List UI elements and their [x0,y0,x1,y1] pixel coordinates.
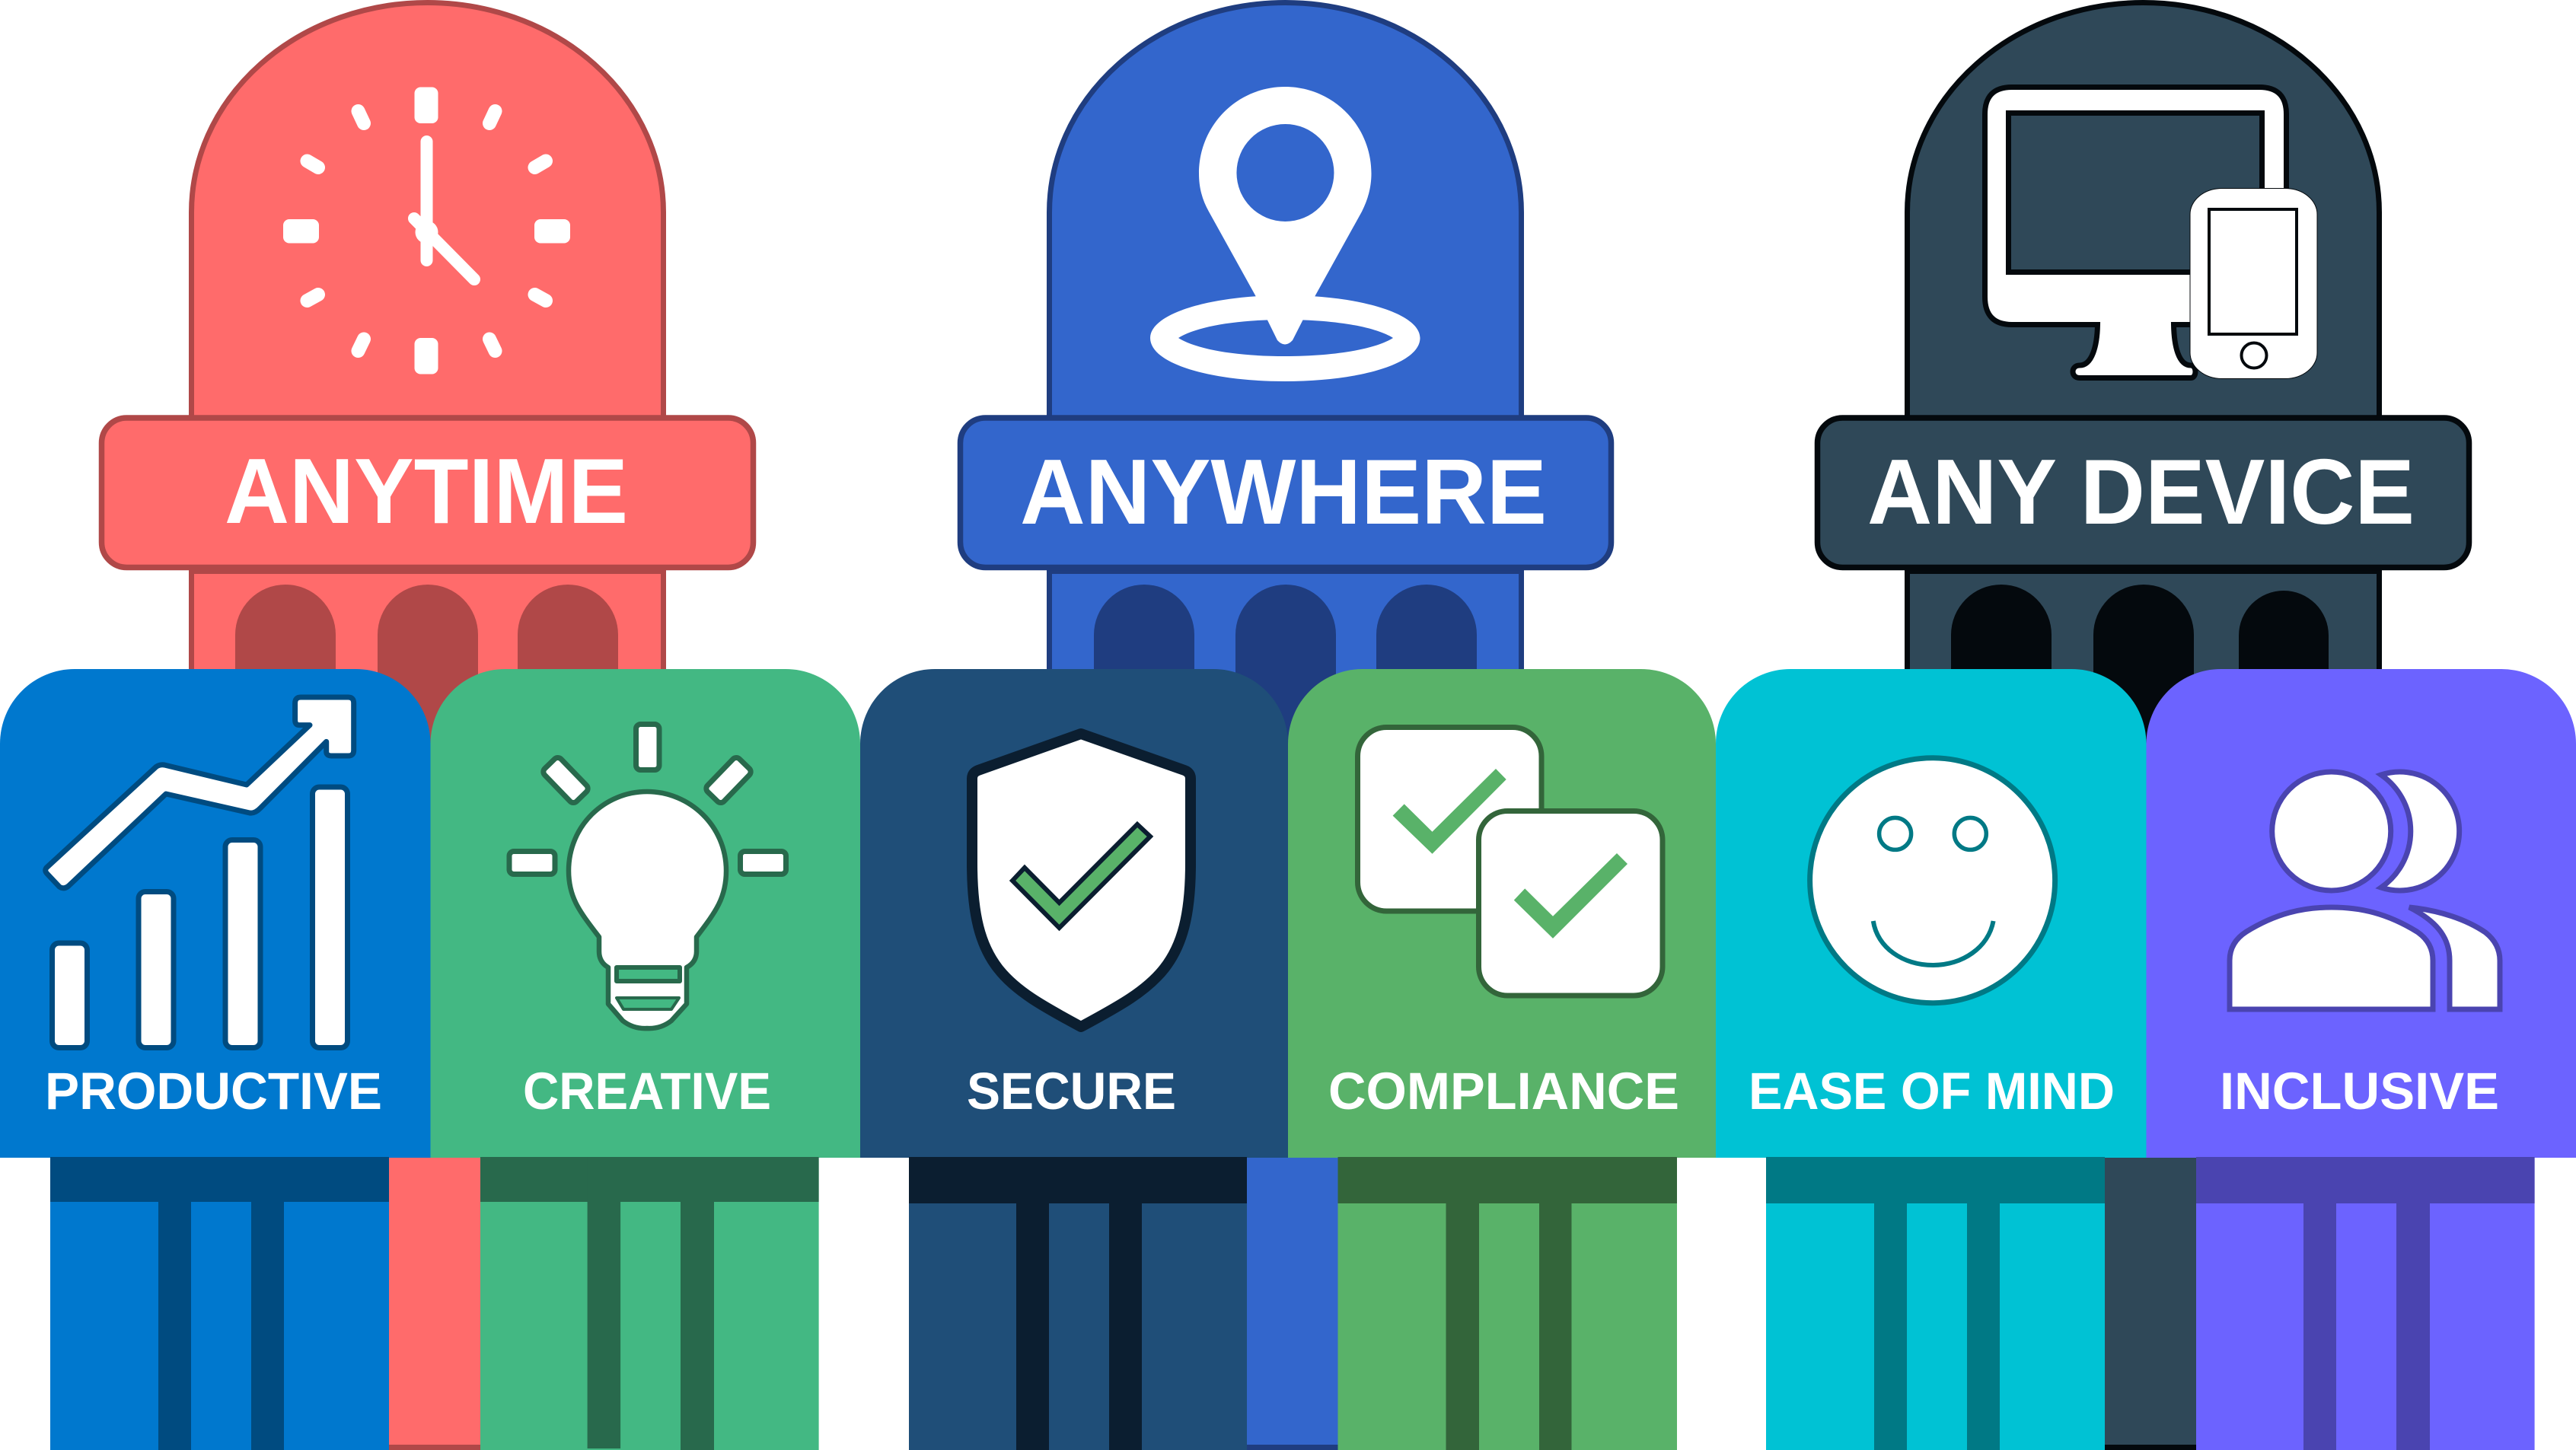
pillar: inclusive [2147,669,2576,1450]
bulb thread top [617,967,680,981]
pillar: compliance [1288,669,1716,1450]
phone button [2241,343,2267,368]
clock major ticks [283,87,570,374]
pillar card [431,669,860,1158]
pillar base [2196,1157,2535,1450]
front head [2272,772,2391,891]
icon: check boxes [1358,728,1663,996]
first check mark [1393,769,1506,854]
first check box [1358,728,1541,911]
shield check [1012,824,1150,928]
phone screen [2209,209,2297,334]
icon: people [2230,772,2500,1009]
band underline [1047,567,1524,574]
pillar base [1766,1157,2105,1450]
label: compliance: COMPLIANCE [1328,1062,1679,1120]
icon: clock [283,87,570,374]
pillar: productive [0,669,431,1450]
smile [1873,921,1994,965]
label: creative: CREATIVE [523,1062,771,1120]
pin head [1199,87,1372,344]
pillar base [1338,1157,1677,1450]
pillar base [909,1157,1247,1450]
right eye [1954,817,1986,849]
bulb glass [569,792,726,1028]
icon: shield [972,734,1191,1027]
tower body [192,2,664,1447]
band underline [1905,567,2382,574]
panel: any device tower [1818,2,2469,1447]
icon: rising bar chart [46,697,354,1047]
pillar base [50,1157,389,1450]
heading: anywhere: ANYWHERE [1020,440,1547,543]
icon: monitor and phone [1985,87,2317,379]
tower body [1908,2,2380,1447]
second check mark [1514,853,1628,939]
monitor [1985,87,2287,378]
pillar: secure [860,669,1288,1450]
pillar card [0,669,431,1158]
pillar card [1288,669,1716,1158]
band [1818,418,2469,568]
label: secure: SECURE [967,1062,1176,1120]
tower windows [1951,585,2329,1157]
pin ring [1150,295,1420,381]
label: ease of mind: EASE OF MIND [1749,1062,2115,1120]
tower body [1049,2,1521,1447]
tower windows [235,585,618,1157]
left eye [1879,817,1911,849]
pillar card [2147,669,2576,1158]
pillar: creative [431,669,860,1450]
label: inclusive: INCLUSIVE [2220,1062,2499,1120]
icon: smiley face [1810,758,2055,1003]
icon: map pin [1150,87,1420,381]
heading: anytime: ANYTIME [225,439,628,543]
monitor screen [2008,113,2262,272]
pillar card [860,669,1288,1158]
bars [52,787,347,1047]
clock hands [414,142,474,279]
panel: anytime tower [102,2,754,1447]
pillar base [480,1157,819,1450]
trend arrow [46,697,354,888]
front body [2230,907,2433,1009]
clock hub [416,221,438,244]
bulb thread bottom [617,998,679,1009]
pillar: ease of mind [1716,669,2147,1450]
band [961,418,1611,568]
band underline [189,567,666,574]
back head [2381,772,2460,891]
face [1810,758,2055,1003]
panel: anywhere tower [961,2,1611,1447]
bulb rays [509,725,786,874]
second check box [1478,811,1663,996]
band [102,418,754,568]
back body [2409,907,2500,1009]
heading: any device: ANY DEVICE [1867,440,2415,543]
label: productive: PRODUCTIVE [45,1062,382,1120]
shield body [972,734,1191,1027]
icon: light bulb [509,725,786,1028]
clock minor ticks [308,111,546,351]
tower windows [1094,585,1477,1157]
phone [2190,189,2317,379]
pillar card [1716,669,2147,1158]
